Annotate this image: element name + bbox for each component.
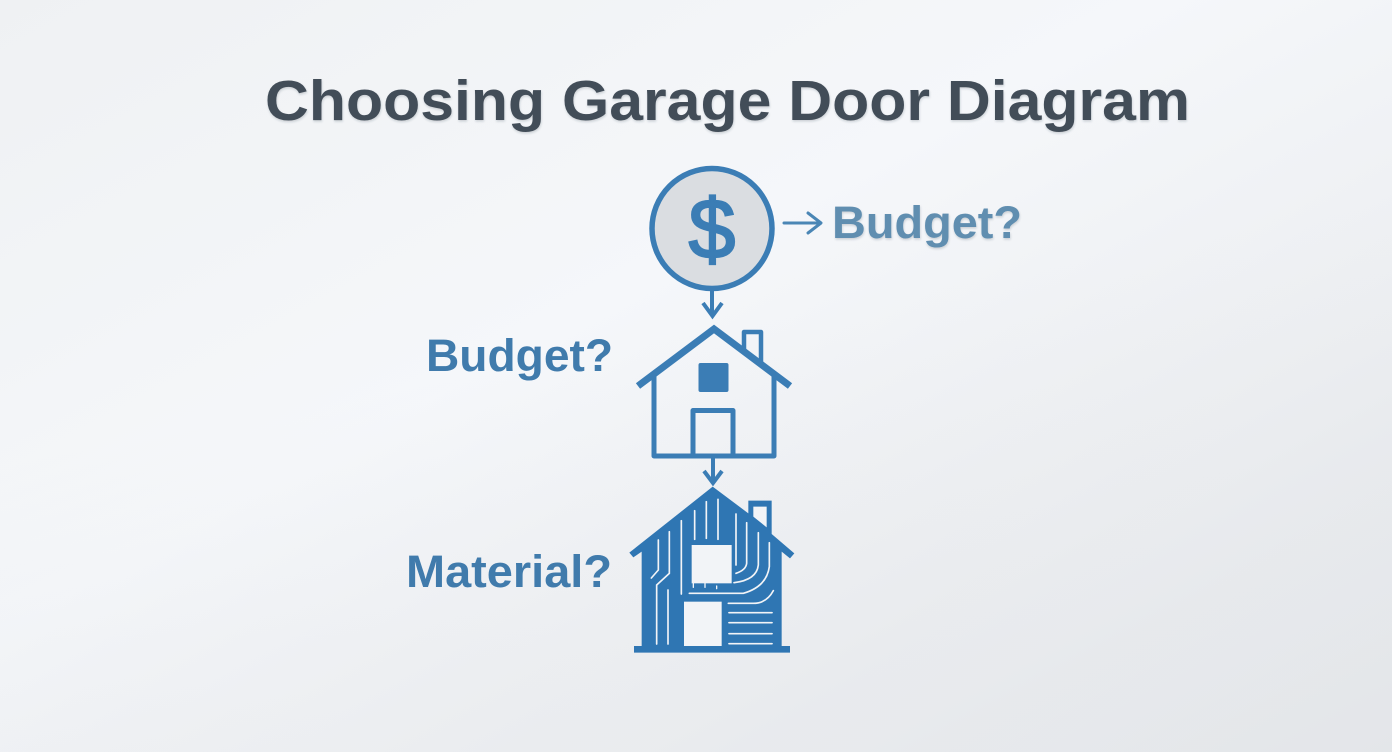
arrow: house to house xyxy=(704,458,722,483)
roof xyxy=(638,329,790,386)
icon: textured solid house xyxy=(629,487,794,653)
arrow: coin to budget label xyxy=(784,213,821,233)
arrow: coin to house xyxy=(703,289,722,316)
icon: dollar coin: $ xyxy=(689,182,735,276)
walls xyxy=(654,372,774,456)
window opening xyxy=(692,545,732,583)
label: budget left: Budget? xyxy=(426,330,613,381)
window xyxy=(698,363,728,392)
door opening xyxy=(684,602,722,646)
label: budget right: Budget? xyxy=(832,197,1022,248)
icon: dollar coin xyxy=(652,168,772,288)
chimney xyxy=(744,332,761,366)
icon: outline house xyxy=(638,329,790,456)
title: Choosing Garage Door Diagram xyxy=(265,69,1190,133)
door xyxy=(693,410,733,456)
label: material: Material? xyxy=(406,546,612,597)
chimney opening xyxy=(753,507,767,527)
